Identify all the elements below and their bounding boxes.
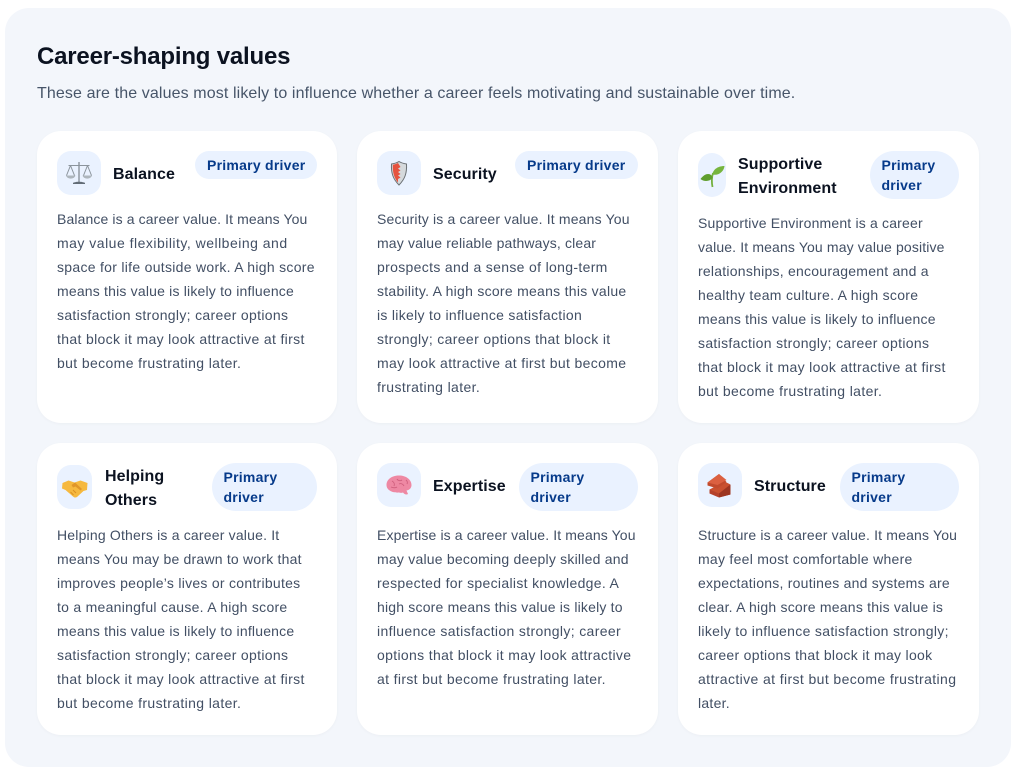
heading: Security <box>433 166 497 183</box>
description: Security is a career value. It means You <box>377 211 630 227</box>
badge: Primary <box>852 469 905 485</box>
description: Helping Others is a career value. It <box>57 527 279 543</box>
badge: Primary <box>224 469 277 485</box>
description: that block it may look attractive at first <box>698 359 946 375</box>
badge: driver <box>530 489 571 505</box>
heading: Structure <box>754 478 826 495</box>
description: but become frustrating later. <box>57 355 241 371</box>
description <box>698 215 946 399</box>
subtitle: These are the values most likely to influence whether a career feels motivating and sustainable over time. <box>37 85 795 102</box>
description: expectations, routines and systems are <box>698 575 950 591</box>
description <box>377 211 630 395</box>
badge <box>195 151 317 179</box>
icon: seedling <box>698 153 726 197</box>
badge: Primary <box>882 157 935 173</box>
description: improves people’s lives or contributes <box>57 575 300 591</box>
description: may look attractive at first but become <box>377 355 626 371</box>
heading: Environment <box>738 180 837 197</box>
description: high score means this value is likely to <box>377 599 623 615</box>
badge: driver <box>882 177 922 193</box>
description: career options that block it may look <box>698 647 932 663</box>
title: Career-shaping values <box>37 43 290 70</box>
description: frustrating later. <box>377 379 480 395</box>
description: satisfaction strongly; career options <box>57 307 288 323</box>
description <box>57 211 315 371</box>
description: to a meaningful cause. A high score <box>57 599 287 615</box>
description: means this value is likely to influence <box>57 623 294 639</box>
description <box>698 527 957 711</box>
description: satisfaction strongly; career options <box>698 335 929 351</box>
description <box>377 527 636 687</box>
badge: Primary driver <box>527 157 625 173</box>
badge <box>870 151 959 199</box>
badge: Primary <box>530 469 584 485</box>
badge <box>840 463 959 511</box>
description: may feel most comfortable where <box>698 551 913 567</box>
card: Structure <box>678 443 979 735</box>
description: means You may be drawn to work that <box>57 551 302 567</box>
description: stability. A high score means this value <box>377 283 626 299</box>
badge <box>519 463 638 511</box>
card: Balance <box>37 131 337 423</box>
heading: Helping <box>105 468 164 485</box>
icon: balance scale <box>57 151 101 195</box>
heading <box>105 468 164 509</box>
description: Structure is a career value. It means You <box>698 527 957 543</box>
card: Supportive Environment <box>678 131 979 423</box>
description: that block it may look attractive at first <box>57 331 305 347</box>
description: is likely to influence satisfaction <box>377 307 582 323</box>
heading: Expertise <box>433 478 506 495</box>
badge <box>515 151 638 179</box>
icon: brain <box>377 463 421 507</box>
badge <box>212 463 317 511</box>
card: Security <box>357 131 658 423</box>
description: may value reliable pathways, clear <box>377 235 596 251</box>
description: influence satisfaction strongly; career <box>377 623 621 639</box>
description: means this value is likely to influence <box>57 283 294 299</box>
card: Helping Others <box>37 443 337 735</box>
description: later. <box>698 695 730 711</box>
description: healthy team culture. A high score <box>698 287 918 303</box>
description: at first but become frustrating later. <box>377 671 606 687</box>
heading: Balance <box>113 166 175 183</box>
description: but become frustrating later. <box>57 695 241 711</box>
description: may value flexibility, wellbeing and <box>57 235 288 251</box>
icon: handshake <box>57 465 92 509</box>
description: likely to influence satisfaction strongly; <box>698 623 949 639</box>
description: Supportive Environment is a career <box>698 215 923 231</box>
description: strongly; career options that block it <box>377 331 611 347</box>
badge: Primary driver <box>207 157 305 173</box>
description: satisfaction strongly; career options <box>57 647 288 663</box>
card: Expertise <box>357 443 658 735</box>
icon: shield <box>377 151 421 195</box>
description: value. It means You may value positive <box>698 239 945 255</box>
description <box>57 527 305 711</box>
icon: bricks <box>698 463 742 507</box>
heading: Supportive <box>738 156 822 173</box>
description: means this value is likely to influence <box>698 311 936 327</box>
description: options that block it may look attractive <box>377 647 631 663</box>
description: attractive at first but become frustrating <box>698 671 956 687</box>
description: Balance is a career value. It means You <box>57 211 307 227</box>
description: clear. A high score means this value is <box>698 599 943 615</box>
description: that block it may look attractive at first <box>57 671 305 687</box>
badge: driver <box>224 489 264 505</box>
heading <box>738 156 837 197</box>
description: prospects and a sense of long-term <box>377 259 608 275</box>
description: relationships, encouragement and a <box>698 263 929 279</box>
description: but become frustrating later. <box>698 383 882 399</box>
description: may value becoming deeply skilled and <box>377 551 629 567</box>
description: respected for specialist knowledge. A <box>377 575 619 591</box>
description: Expertise is a career value. It means You <box>377 527 636 543</box>
heading: Others <box>105 492 157 509</box>
description: space for life outside work. A high score <box>57 259 315 275</box>
badge: driver <box>852 489 892 505</box>
